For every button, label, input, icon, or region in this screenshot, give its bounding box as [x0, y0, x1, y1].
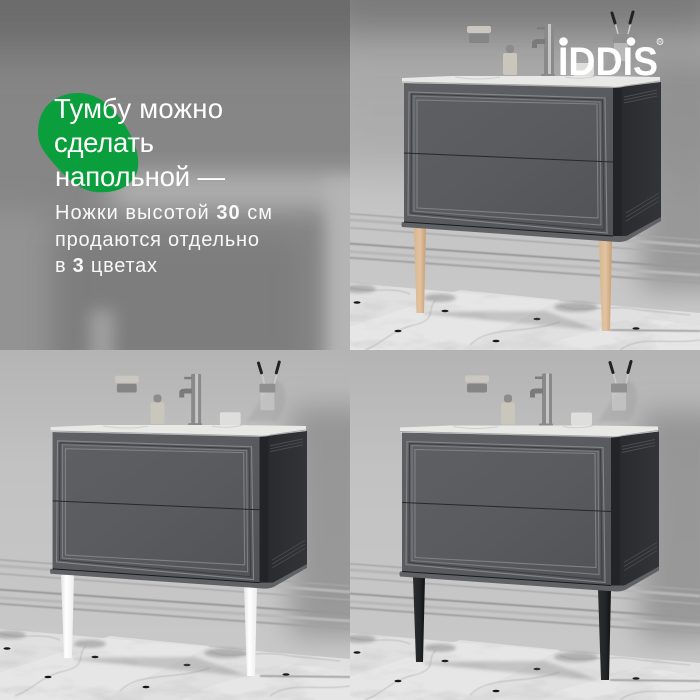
heading: сделать	[54, 127, 154, 158]
panel: vanity with oak legs	[350, 0, 700, 350]
subheading: в 3 цветах	[55, 255, 157, 277]
subheading: продаются отдельно	[55, 229, 259, 251]
logo: IDDIS: R	[658, 40, 662, 46]
heading: Тумбу можно	[54, 93, 223, 124]
panel: text background	[0, 0, 350, 350]
logo: IDDIS: IDDIS	[558, 40, 658, 84]
subheading	[55, 202, 272, 277]
heading: напольной —	[55, 161, 226, 192]
oak legs	[414, 228, 612, 331]
heading	[54, 93, 226, 192]
subheading: Ножки высотой 30 см	[55, 202, 272, 224]
green blob	[38, 93, 138, 192]
panel: vanity with black legs	[340, 340, 700, 700]
panel: vanity with white legs	[0, 350, 350, 700]
